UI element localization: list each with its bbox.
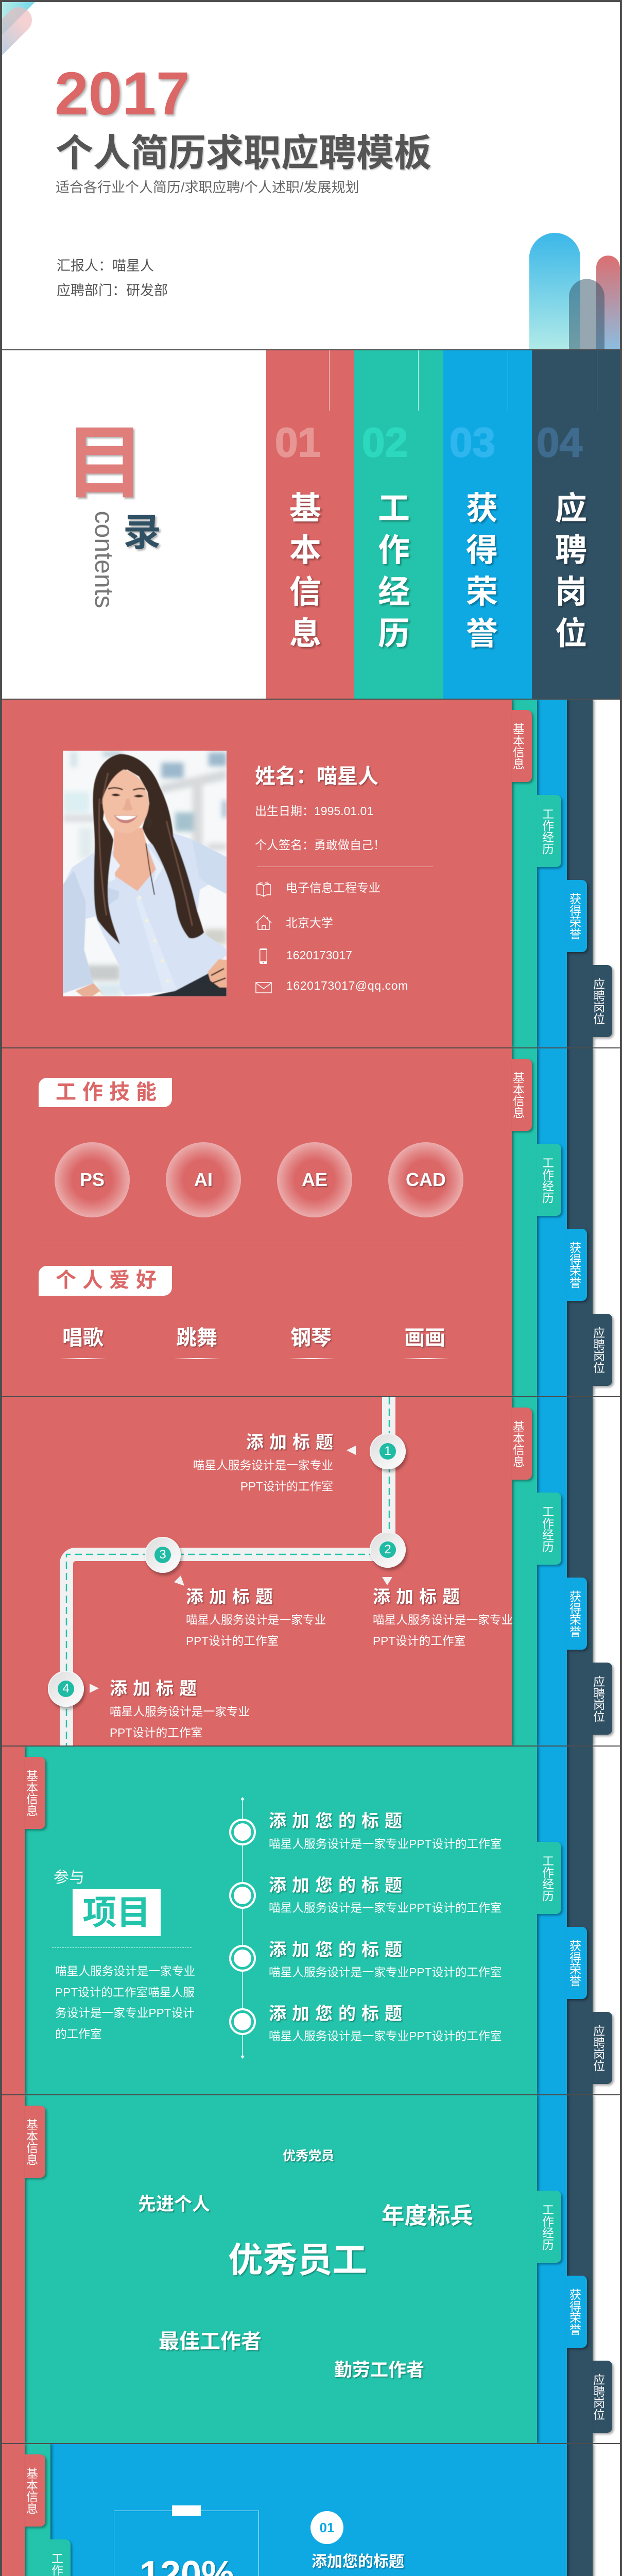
text block 2	[373, 1587, 513, 1648]
tab: 基本信息: 信	[26, 2490, 38, 2503]
tab: 应聘岗位	[593, 2361, 612, 2433]
arrow 2	[382, 1577, 392, 1585]
badge 01: 01	[320, 2520, 334, 2535]
heading: 工作技能	[39, 1078, 172, 1107]
tab: 应聘岗位: 位	[593, 1361, 605, 1375]
panel: 基本信息	[266, 350, 354, 699]
label: 荣	[466, 574, 498, 610]
tab: 获得荣誉	[567, 1229, 587, 1301]
tab: 应聘岗位: 应	[593, 1675, 605, 1688]
heading: 工作技能: 工作技能	[56, 1081, 163, 1104]
tab: 获得荣誉	[567, 1927, 587, 1999]
number 04: 04	[537, 419, 582, 465]
paragraph: 的工作室	[55, 2027, 102, 2041]
label: 得	[466, 533, 498, 568]
label: 息	[289, 616, 321, 652]
tab: 应聘岗位: 应	[593, 2373, 605, 2386]
text block 3: 喵星人服务设计是一家专业	[186, 1613, 326, 1626]
icon: house	[255, 915, 272, 930]
tab: 基本信息: 基	[26, 2118, 38, 2131]
item 4: 添加您的标题	[269, 2004, 408, 2024]
tab: 工作经历: 经	[542, 2226, 554, 2240]
signature: 个人签名：勇敢做自己！	[255, 838, 385, 852]
name: 姓名：喵星人	[255, 765, 378, 788]
tab: 基本信息: 本	[26, 1781, 38, 1794]
tab: 工作经历: 作	[542, 819, 554, 833]
tab: 基本信息: 本	[513, 1083, 525, 1096]
text block 1: 喵星人服务设计是一家专业	[193, 1459, 333, 1472]
node 1: 1	[384, 1444, 391, 1458]
tab: 获得荣誉: 誉	[569, 1276, 581, 1289]
tab: 基本信息	[512, 1059, 532, 1131]
tab: 应聘岗位: 岗	[593, 2047, 605, 2061]
tab: 获得荣誉: 得	[569, 1951, 581, 1964]
tab: 工作经历	[537, 1144, 561, 1216]
tab: 工作经历: 作	[542, 1517, 554, 1530]
item 1: 喵星人服务设计是一家专业PPT设计的工作室	[269, 1837, 502, 1851]
tab: 获得荣誉: 荣	[569, 2311, 581, 2325]
tab: 获得荣誉: 获	[569, 1590, 581, 1603]
tab: 工作经历: 经	[542, 831, 554, 844]
tab: 应聘岗位: 岗	[593, 1698, 605, 1711]
tab: 工作经历: 历	[542, 1539, 554, 1553]
tab: 基本信息: 信	[513, 745, 525, 759]
heading: contents: contents	[90, 511, 118, 608]
tab: 基本信息: 本	[513, 734, 525, 747]
box: 项目	[73, 1889, 161, 1936]
subtitle: 适合各行业个人简历/求职应聘/个人述职/发展规划	[56, 180, 359, 195]
text block 3: 添加标题	[186, 1587, 279, 1607]
number 03: 03	[450, 419, 495, 465]
text block 4: 喵星人服务设计是一家专业	[110, 1705, 250, 1718]
item 3: 添加您的标题	[269, 1940, 408, 1960]
honour: 优秀党员: 优秀党员	[283, 2149, 334, 2163]
honour: 勤劳工作者: 勤劳工作者	[334, 2360, 424, 2380]
photo	[63, 751, 227, 996]
tab: 基本信息: 基	[513, 1420, 525, 1433]
tab: 基本信息: 基	[513, 722, 525, 736]
item 2: 添加您的标题	[269, 1876, 408, 1895]
label: 聘	[555, 533, 587, 568]
tab: 获得荣誉: 荣	[569, 1613, 581, 1626]
node 4	[48, 1671, 84, 1707]
tab: 获得荣誉: 得	[569, 904, 581, 917]
node 2	[370, 1532, 406, 1568]
item 2: 喵星人服务设计是一家专业PPT设计的工作室	[269, 1901, 502, 1914]
skill: CAD: CAD	[406, 1169, 446, 1190]
arrow 3	[174, 1575, 184, 1586]
paragraph: PPT设计的工作室喵星人服	[55, 1986, 195, 1999]
paragraph: 务设计是一家专业PPT设计	[55, 2006, 195, 2020]
tab: 基本信息: 信	[513, 1094, 525, 1108]
tab: 应聘岗位: 位	[593, 2408, 605, 2421]
text block 4	[110, 1679, 250, 1739]
text block 1: 添加标题	[246, 1433, 339, 1452]
heading: 2017: 2017	[55, 60, 190, 128]
tab: 基本信息: 信	[26, 1792, 38, 1806]
heading: 个人爱好	[39, 1266, 172, 1296]
skill: PS: PS	[80, 1169, 105, 1190]
text: major: 电子信息工程专业	[286, 881, 381, 894]
tab: 获得荣誉	[567, 1578, 587, 1650]
text: email: 1620173017@qq.com	[286, 979, 408, 992]
skill: AI	[166, 1142, 241, 1217]
tab: 基本信息: 本	[513, 1431, 525, 1445]
item 1: 添加您的标题	[269, 1811, 408, 1831]
label: 获	[466, 491, 498, 527]
slide: projects	[0, 1747, 622, 2094]
skill: AE	[277, 1142, 352, 1217]
label: 作	[378, 533, 410, 568]
tab: 应聘岗位: 应	[593, 2024, 605, 2038]
tab: 应聘岗位: 聘	[593, 2036, 605, 2049]
node 4: 4	[62, 1682, 70, 1696]
tab: 工作经历: 历	[542, 2238, 554, 2251]
tab: 获得荣誉: 誉	[569, 2323, 581, 2336]
tab: 基本信息: 本	[26, 2130, 38, 2143]
tab: 工作经历: 工	[542, 1505, 554, 1518]
label: 信	[289, 574, 321, 610]
tab: 基本信息: 本	[26, 2478, 38, 2492]
tab: 基本信息	[25, 2106, 45, 2178]
timeline	[241, 1797, 244, 2059]
tab: 应聘岗位: 聘	[593, 1687, 605, 1700]
honour: 年度标兵: 年度标兵	[382, 2204, 473, 2229]
text block 1: PPT设计的工作室	[240, 1480, 333, 1493]
tab: 工作经历: 作	[542, 1866, 554, 1879]
text block 2: PPT设计的工作室	[373, 1634, 465, 1648]
tab: 工作经历	[50, 2539, 71, 2576]
slide: contents	[0, 350, 622, 699]
tab: 获得荣誉: 获	[569, 1939, 581, 1953]
tab: 工作经历: 经	[542, 1528, 554, 1541]
tab: 基本信息: 信	[26, 2141, 38, 2155]
text block 1	[193, 1433, 339, 1493]
icon: mail	[255, 982, 272, 993]
panel: 工作经历	[354, 350, 443, 699]
tab: 应聘岗位: 位	[593, 1012, 605, 1025]
marker 2	[229, 1882, 256, 1909]
label	[378, 491, 411, 652]
number 01: 01	[275, 419, 321, 465]
paragraph: 喵星人服务设计是一家专业	[55, 1964, 195, 1978]
tab: 获得荣誉: 得	[569, 2300, 581, 2313]
icon: phone	[260, 948, 267, 964]
tab: 应聘岗位: 应	[593, 977, 605, 991]
slide: basic info	[0, 700, 622, 1047]
tab: 获得荣誉: 获	[569, 2288, 581, 2301]
tab: 应聘岗位: 岗	[593, 1349, 605, 1363]
tab: 工作经历: 历	[542, 842, 554, 855]
tab: 获得荣誉: 誉	[569, 1625, 581, 1638]
paragraph	[55, 1964, 195, 2041]
tab: 获得荣誉: 誉	[569, 927, 581, 941]
skill: AI: AI	[194, 1169, 213, 1190]
label	[555, 491, 588, 652]
label	[466, 491, 499, 652]
marker 4	[229, 2008, 256, 2035]
tab: 工作经历: 作	[542, 1167, 554, 1181]
tab: 基本信息: 息	[513, 757, 525, 771]
arrow 4	[90, 1684, 99, 1693]
slide: cover	[0, 0, 622, 349]
tab: 工作经历: 工	[542, 2203, 554, 2216]
tab: 工作经历	[537, 1842, 561, 1914]
item 1 title: 添加您的标题	[312, 2553, 404, 2570]
icon: corner decoration	[2, 2, 35, 56]
tab: 获得荣誉: 获	[569, 1241, 581, 1255]
label: 本	[289, 533, 321, 568]
tab: 应聘岗位	[593, 2012, 612, 2084]
department: 应聘部门：研发部	[57, 283, 168, 298]
heading: 录: 录	[123, 511, 161, 554]
node 2: 2	[384, 1543, 391, 1556]
label: 历	[378, 616, 410, 652]
item 1 text	[311, 2574, 489, 2576]
label: 岗	[555, 574, 587, 610]
tab: 工作经历: 工	[542, 1156, 554, 1170]
tab: 应聘岗位: 位	[593, 1709, 605, 1723]
tab: 基本信息: 息	[513, 1106, 525, 1119]
tab: 基本信息	[512, 1408, 532, 1480]
hobby: 画画: 画画	[404, 1327, 445, 1349]
text: phone: 1620173017	[286, 948, 352, 962]
tab: 获得荣誉: 荣	[569, 1264, 581, 1278]
arrow 1	[347, 1446, 356, 1455]
item 4: 喵星人服务设计是一家专业PPT设计的工作室	[269, 2029, 502, 2043]
honour: 优秀员工: 优秀员工	[228, 2241, 367, 2280]
text block 2: 添加标题	[373, 1587, 465, 1607]
label: 位	[555, 616, 587, 652]
item 3	[269, 1940, 502, 1979]
item 1	[269, 1811, 502, 1851]
tab: 工作经历: 工	[542, 1854, 554, 1868]
text block 3	[186, 1587, 326, 1648]
birth date: 出生日期：1995.01.01	[255, 804, 373, 818]
tab: 获得荣誉	[567, 880, 587, 952]
tab: 基本信息	[25, 2454, 45, 2527]
text block 4: 添加标题	[110, 1679, 202, 1699]
slide: achievements	[0, 2444, 622, 2576]
marker 3	[229, 1945, 256, 1972]
node 1	[370, 1433, 406, 1469]
heading: 个人爱好: 个人爱好	[56, 1269, 163, 1292]
label: 誉	[466, 616, 498, 652]
tab: 工作经历	[537, 1493, 561, 1565]
slide: skills	[0, 1048, 622, 1396]
panel: 获得荣誉	[443, 350, 532, 699]
box: 项目: 项目	[82, 1893, 150, 1931]
tab: 应聘岗位: 应	[593, 1326, 605, 1340]
tab: 工作经历	[537, 2191, 561, 2263]
marker 1	[229, 1819, 256, 1845]
item 2	[269, 1876, 502, 1914]
tab: 应聘岗位	[593, 965, 612, 1037]
label: 基	[289, 491, 321, 527]
icon: book	[256, 882, 271, 897]
tab: 工作经历: 工	[542, 807, 554, 821]
tab: 工作经历: 历	[542, 1889, 554, 1902]
text: school: 北京大学	[286, 916, 333, 929]
skill: AE: AE	[302, 1169, 327, 1190]
tab: 基本信息: 息	[26, 2502, 38, 2515]
chart: winding road	[60, 1397, 395, 1745]
tab: 基本信息	[512, 710, 532, 782]
slide: honours	[0, 2095, 622, 2443]
tab: 基本信息: 息	[26, 1804, 38, 1818]
tab: 应聘岗位: 岗	[593, 2396, 605, 2410]
hobby: 唱歌: 唱歌	[62, 1327, 103, 1349]
tab: 应聘岗位: 聘	[593, 1337, 605, 1351]
tab: 获得荣誉	[567, 2276, 587, 2348]
icon: pill decoration	[529, 233, 620, 349]
tab: 工作经历: 经	[542, 1877, 554, 1891]
tab: 基本信息: 基	[26, 2467, 38, 2480]
hobby: 钢琴: 钢琴	[290, 1327, 332, 1349]
text block 2: 喵星人服务设计是一家专业	[373, 1613, 513, 1626]
heading: 目: 目	[65, 419, 145, 508]
reporter: 汇报人：喵星人	[57, 258, 154, 274]
tab: 基本信息	[25, 1757, 45, 1829]
tab: 工作经历: 经	[542, 1179, 554, 1193]
tab: 基本信息: 基	[26, 1769, 38, 1783]
tab: 基本信息: 息	[26, 2153, 38, 2166]
badge 01	[310, 2511, 343, 2544]
item 3: 喵星人服务设计是一家专业PPT设计的工作室	[269, 1965, 502, 1979]
label	[289, 491, 323, 652]
hobby: 跳舞: 跳舞	[176, 1327, 217, 1349]
tab: 基本信息: 基	[513, 1071, 525, 1084]
skill: PS	[55, 1142, 130, 1217]
tab: 获得荣誉: 得	[569, 1253, 581, 1266]
tab: 工作经历: 历	[542, 1191, 554, 1205]
tab: 应聘岗位	[593, 1663, 612, 1735]
tab: 基本信息: 信	[513, 1443, 525, 1456]
tab: 工作经历	[537, 795, 561, 867]
panel: 应聘岗位	[532, 350, 620, 699]
tab: 获得荣誉: 誉	[569, 1974, 581, 1988]
tab: 获得荣誉: 得	[569, 1601, 581, 1615]
tab: 基本信息: 息	[513, 1455, 525, 1468]
tab: 获得荣誉: 获	[569, 892, 581, 906]
label: 工	[378, 491, 410, 527]
honour: 最佳工作者: 最佳工作者	[159, 2330, 262, 2353]
tab: 应聘岗位: 岗	[593, 1001, 605, 1014]
label: 应	[555, 491, 587, 527]
text: 参与: 参与	[54, 1869, 84, 1886]
slide: path timeline	[0, 1397, 622, 1745]
title: 个人简历求职应聘模板	[56, 132, 431, 174]
node 3: 3	[159, 1548, 166, 1562]
tab: 应聘岗位: 聘	[593, 989, 605, 1003]
tab: 工作经历: 作	[542, 2214, 554, 2228]
tab: 获得荣誉: 荣	[569, 1962, 581, 1976]
text block 3: PPT设计的工作室	[186, 1634, 279, 1648]
tab: 获得荣誉: 荣	[569, 916, 581, 929]
panel: stat box	[114, 2511, 259, 2576]
tab: 应聘岗位: 聘	[593, 2384, 605, 2398]
item 4	[269, 2004, 502, 2043]
node 3	[145, 1537, 181, 1573]
tab: 应聘岗位	[593, 1314, 612, 1386]
text block 4: PPT设计的工作室	[110, 1726, 202, 1739]
label: 经	[378, 574, 410, 610]
tab: 应聘岗位: 位	[593, 2059, 605, 2072]
skill: CAD	[388, 1142, 463, 1217]
tab: 工作经历: 工	[51, 2552, 63, 2565]
number 02: 02	[362, 419, 408, 465]
honour: 先进个人: 先进个人	[138, 2194, 210, 2214]
